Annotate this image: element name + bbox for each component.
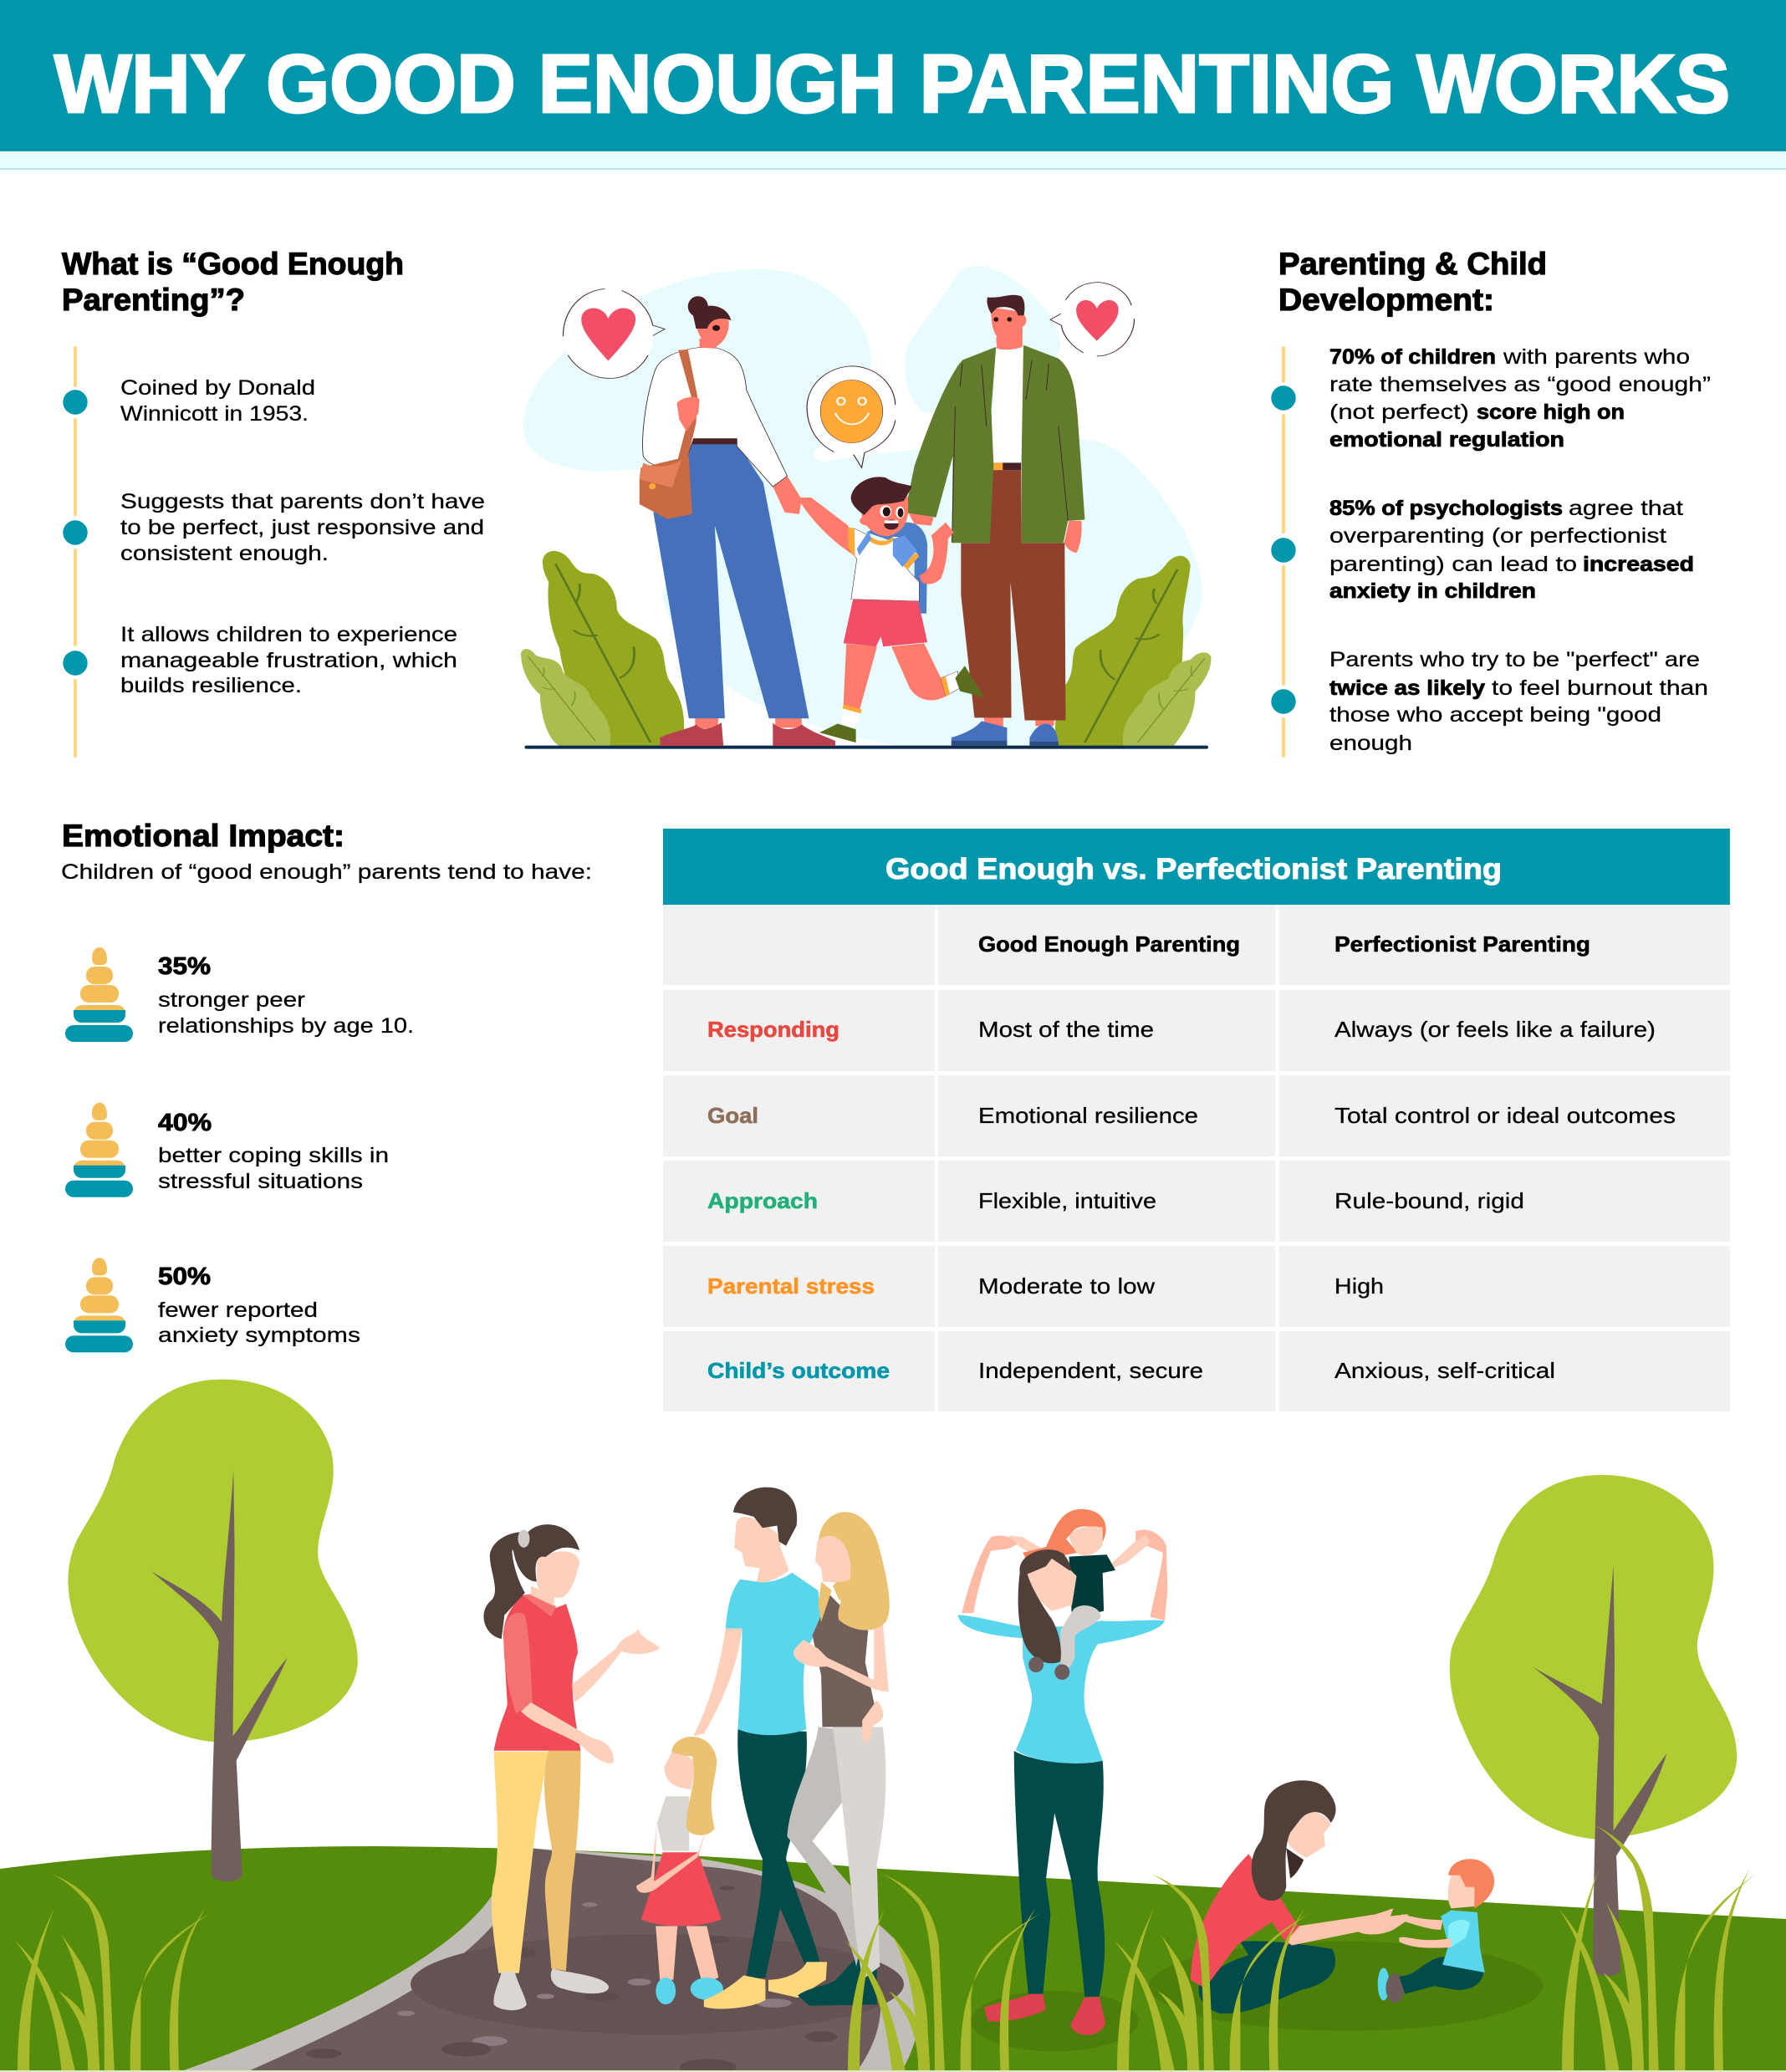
tree right [1450, 1475, 1737, 1976]
figure: father [905, 295, 1084, 746]
figure: child [793, 477, 984, 743]
row: childs outcome: Anxious, self-critical [1334, 1358, 1555, 1383]
figure: girl [636, 1737, 723, 2004]
heading: what is good enough parenting [62, 247, 404, 317]
header banner [0, 0, 1786, 170]
row: parental stress: High [1334, 1273, 1384, 1299]
text: allows: It allows children to experience [120, 623, 457, 646]
stat: 50 percent [158, 1263, 360, 1347]
text: coined: Winnicott in 1953. [120, 402, 309, 426]
text: allows [120, 623, 457, 697]
column headers [978, 931, 1590, 957]
text: 85 percent [1329, 497, 1694, 603]
row: goal: Goal [707, 1103, 758, 1128]
bottom edge line [0, 2070, 1786, 2072]
figure: sitting mother [1191, 1780, 1408, 2013]
row: responding: Most of the time [978, 1017, 1154, 1042]
row: approach: Rule-bound, rigid [1334, 1188, 1524, 1213]
text: 85 percent: overparenting (or perfectionist [1329, 524, 1666, 548]
text: suggests: consistent enough. [120, 542, 329, 565]
text: allows: manageable frustration, which [120, 649, 457, 672]
row: approach [707, 1188, 1524, 1213]
column headers: Good Enough Parenting [978, 931, 1240, 957]
stat: 50 percent: anxiety symptoms [158, 1324, 360, 1347]
text: burnout: those who accept being "good [1329, 703, 1661, 727]
text: 70 percent: score high on [1477, 401, 1625, 424]
ground [0, 1846, 1786, 2072]
text: burnout: enough [1329, 732, 1412, 755]
illustration: park scene [0, 1380, 1786, 2072]
tree left [68, 1380, 358, 1881]
text: suggests: to be perfect, just responsive and [120, 516, 484, 539]
text: coined: Coined by Donald [120, 376, 315, 400]
text: 85 percent: anxiety in children [1329, 579, 1536, 603]
figure: standing mother [958, 1529, 1167, 2035]
row: goal: Total control or ideal outcomes [1334, 1103, 1676, 1128]
text: 70 percent: emotional regulation [1329, 428, 1564, 452]
timeline right [1271, 348, 1296, 756]
icon: stacking rings 3 [65, 1258, 133, 1352]
foreground grass left [15, 1872, 212, 2070]
timeline left [63, 348, 88, 756]
text: suggests: Suggests that parents don’t have [120, 490, 485, 513]
text: 70 percent: (not perfect) [1329, 401, 1469, 424]
subheading: Children of “good enough” parents tend to have: [61, 860, 592, 884]
row: responding: Responding [707, 1017, 839, 1042]
row: goal [707, 1103, 1676, 1128]
row: childs outcome [707, 1358, 1555, 1383]
row: approach: Approach [707, 1188, 818, 1213]
heading: parenting and child development [1278, 247, 1547, 317]
stat: 35 percent: stronger peer [158, 988, 305, 1012]
text: suggests [120, 490, 485, 565]
icon: stacking rings 1 [65, 947, 133, 1042]
figure: baby [1378, 1859, 1494, 2003]
stat: 35 percent: relationships by age 10. [158, 1014, 414, 1038]
panel: emotional impact [61, 819, 592, 1352]
stat: 35 percent [158, 953, 414, 1038]
text: 85 percent: 85% of psychologists [1329, 497, 1563, 520]
row: parental stress: Parental stress [707, 1273, 875, 1299]
row: goal: Emotional resilience [978, 1103, 1198, 1128]
figures: mother with child on shoulders and sitting mother with baby [958, 1509, 1543, 2051]
stat: 35 percent: 35% [158, 953, 211, 980]
heading: emotional impact: Emotional Impact: [62, 819, 344, 853]
text: 85 percent: parenting) can lead to [1329, 553, 1577, 576]
panel: parenting and child development [1271, 247, 1711, 756]
table header [663, 829, 1730, 905]
ground line [525, 746, 1208, 749]
heading: what is good enough parenting: What is “Good Enough [62, 247, 404, 281]
illustration: family with speech bubbles [521, 266, 1211, 749]
row: parental stress: Moderate to low [978, 1273, 1155, 1299]
text: burnout: to feel burnout than [1492, 676, 1708, 700]
speech bubble: heart left [563, 289, 665, 378]
text: 70 percent: 70% of children [1329, 345, 1496, 369]
speech bubble: smiley [807, 366, 896, 467]
stat: 50 percent: fewer reported [158, 1299, 318, 1322]
speech bubble: heart right [1050, 282, 1135, 356]
foreground grass center [1115, 1872, 1311, 2070]
stat: 40 percent [158, 1110, 389, 1193]
row: childs outcome: Child’s outcome [707, 1358, 890, 1383]
leaves right [1055, 556, 1211, 746]
stat: 40 percent: 40% [158, 1110, 212, 1136]
comparison table [663, 829, 1730, 1411]
icon: stacking rings 2 [65, 1103, 133, 1197]
ground shadows [971, 1942, 1543, 2051]
stat: 40 percent: stressful situations [158, 1170, 363, 1193]
heading: what is good enough parenting: Parenting”? [62, 283, 245, 317]
table cells [663, 905, 1730, 1411]
column headers: Perfectionist Parenting [1334, 931, 1590, 957]
figure: blonde woman [787, 1512, 890, 2006]
panel: what is good enough parenting [62, 247, 485, 756]
row: responding [707, 1017, 1656, 1042]
text: allows: builds resilience. [120, 674, 302, 697]
text: coined [120, 376, 315, 426]
title: WHY GOOD ENOUGH PARENTING WORKS [54, 38, 1730, 130]
text: burnout: Parents who try to be "perfect" are [1329, 648, 1700, 671]
text: 70 percent: rate themselves as “good enough” [1329, 373, 1711, 396]
figure: child on shoulders [1008, 1509, 1151, 1667]
row: approach: Flexible, intuitive [978, 1188, 1156, 1213]
figure: man in blue t-shirt [693, 1488, 827, 2009]
table header: Good Enough vs. Perfectionist Parenting [885, 853, 1502, 885]
heading: parenting and child development: Development: [1278, 283, 1494, 317]
text: burnout [1329, 648, 1708, 755]
text: 85 percent: agree that [1569, 497, 1683, 520]
pebbles [306, 1886, 838, 2072]
text: 85 percent: increased [1583, 553, 1694, 576]
foreground grass right [1559, 1824, 1756, 2072]
stat: 40 percent: better coping skills in [158, 1144, 389, 1167]
text: burnout: twice as likely [1329, 676, 1485, 700]
heading: parenting and child development: Parenting & Child [1278, 247, 1547, 281]
figure: standing mother head [1018, 1549, 1077, 1680]
row: parental stress [707, 1273, 1384, 1299]
text: 70 percent [1329, 345, 1711, 452]
row: childs outcome: Independent, secure [978, 1358, 1203, 1383]
footpath [179, 1848, 921, 2072]
figure: woman talking [483, 1524, 660, 2010]
stat: 50 percent: 50% [158, 1263, 211, 1290]
figure: mother [640, 296, 835, 746]
background blobs [523, 266, 1202, 746]
foreground grass near path [845, 1872, 1042, 2070]
text: 70 percent: with parents who [1503, 345, 1690, 369]
row: responding: Always (or feels like a failure) [1334, 1017, 1656, 1042]
leaves left [521, 551, 684, 746]
